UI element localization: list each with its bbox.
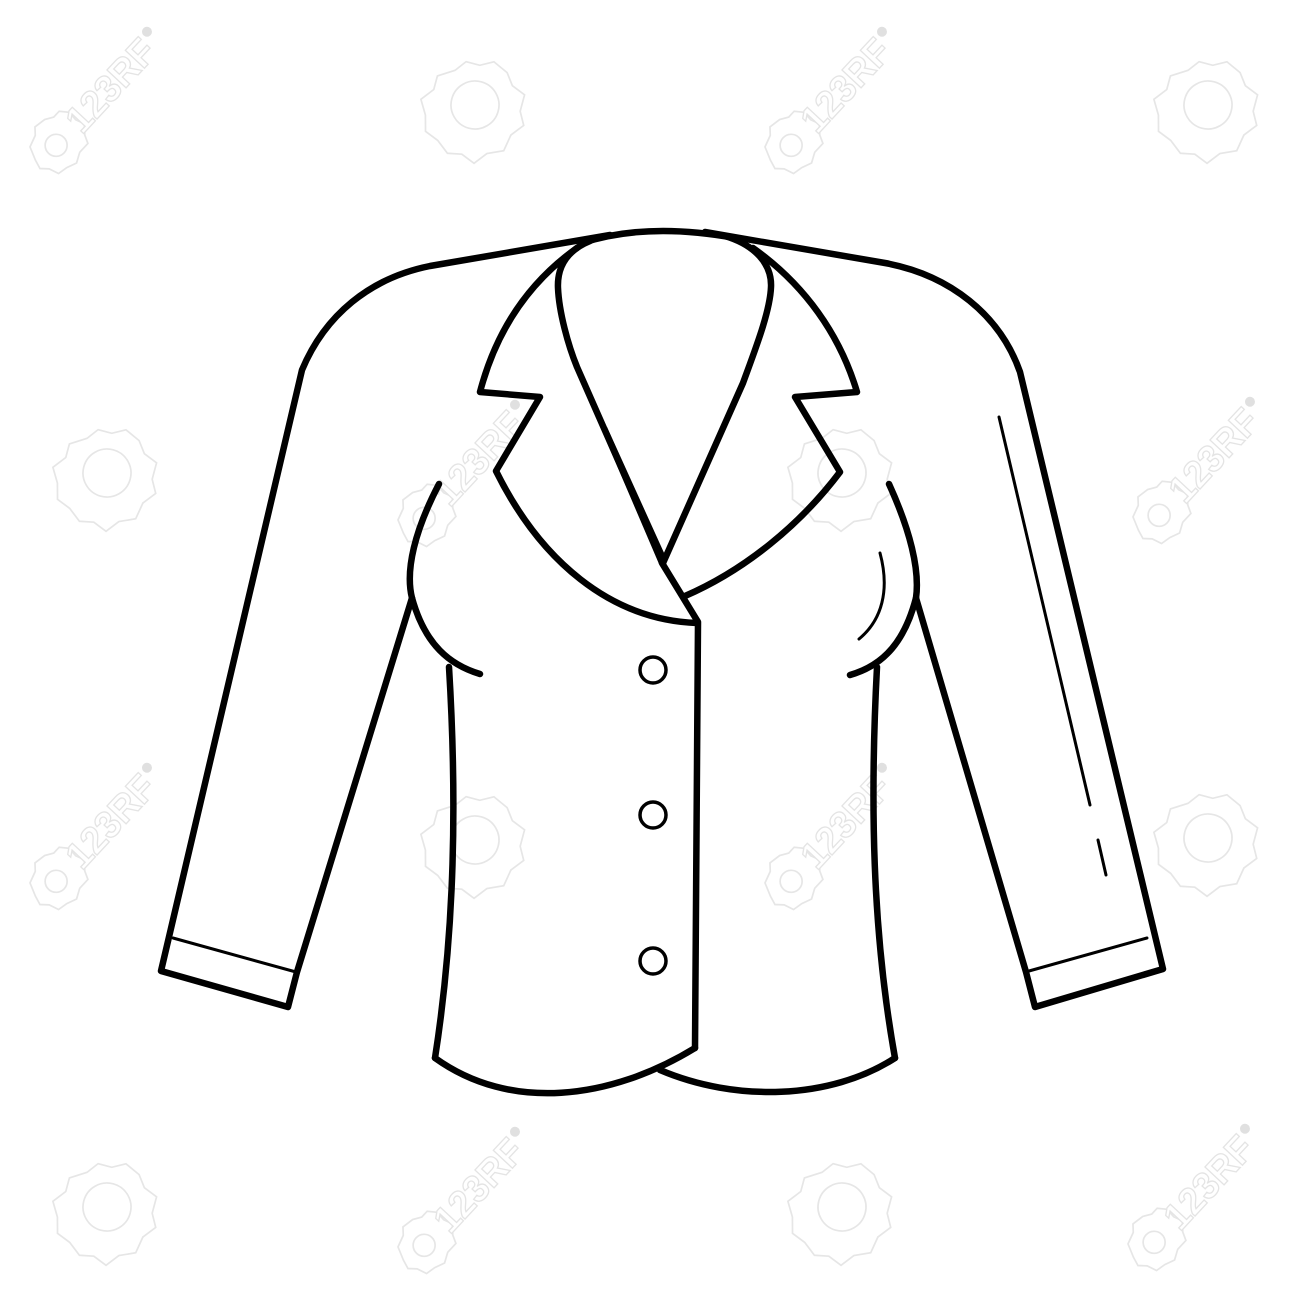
watermark: stock logos: 123RF xyxy=(58,767,165,877)
right hem xyxy=(660,1058,895,1092)
watermark: stock logos: 123RF xyxy=(1161,401,1268,511)
watermark: stock logos: 123RF xyxy=(426,1131,533,1241)
watermark: stock logos: 123RF xyxy=(793,767,900,877)
collar inner curve, left xyxy=(558,241,662,560)
left side seam xyxy=(435,667,453,1058)
right side seam xyxy=(873,667,895,1058)
buttons xyxy=(640,657,666,974)
watermark: stock logos: 123RF xyxy=(426,404,533,514)
watermark: stock logos: 123RF xyxy=(793,31,900,141)
right lapel xyxy=(685,248,857,596)
left hem xyxy=(435,1048,695,1093)
watermark: stock logos: 123RF xyxy=(58,31,165,141)
right cuff seam xyxy=(1029,938,1147,971)
neckline top xyxy=(582,231,735,243)
bust highlight xyxy=(859,553,884,639)
left bust xyxy=(410,484,480,674)
left cuff seam xyxy=(173,938,296,972)
collar inner curve, right xyxy=(663,236,771,563)
placket xyxy=(662,563,698,1048)
sleeve highlight xyxy=(999,417,1106,875)
left lapel xyxy=(480,248,697,623)
jacket outline xyxy=(161,231,1163,1093)
left sleeve and shoulder xyxy=(161,235,610,1007)
right sleeve and shoulder xyxy=(705,232,1163,1007)
watermark: stock logos: 123RF xyxy=(1156,1128,1263,1238)
right bust xyxy=(850,484,917,675)
wedge thickening of left lapel edge xyxy=(603,427,665,564)
